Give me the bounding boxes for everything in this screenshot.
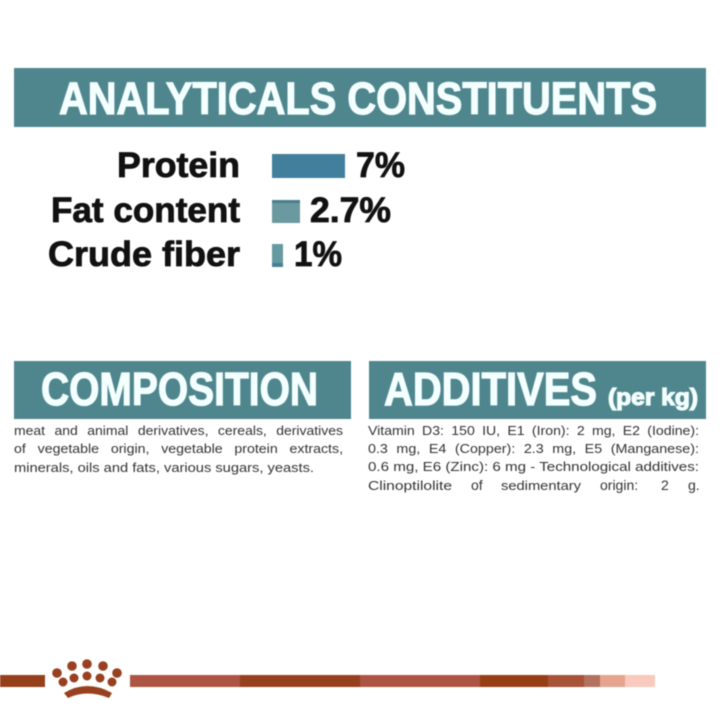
text block: composition: of vegetable origin, vegetable protein extracts, (14, 442, 343, 456)
panel: additives (369, 361, 706, 419)
row: protein: Protein (117, 146, 240, 185)
panel: composition (14, 361, 351, 419)
text block: composition: meat and animal derivatives, cereals, derivatives (14, 424, 343, 438)
text block: additives: Clinoptilolite (368, 479, 452, 493)
bar chart: constituents (48, 146, 405, 274)
text block: composition (14, 424, 343, 475)
row: fat content (51, 191, 391, 230)
row: crude fiber: Crude fiber (48, 235, 240, 274)
text block: additives: of (471, 477, 483, 493)
row: protein: 7% (356, 146, 405, 185)
footer stripe left (0, 675, 45, 687)
text block: additives: sedimentary (501, 479, 582, 493)
heading: composition: COMPOSITION (41, 363, 318, 415)
text block: additives (368, 424, 700, 493)
text block: additives: origin: (600, 477, 638, 493)
heading unit: per kg: (per kg) (608, 384, 698, 410)
row: crude fiber: 1% (294, 235, 342, 274)
text block: additives: Vitamin D3: 150 IU, E1 (Iron): 2 mg, E2 (Iodine): (368, 424, 699, 438)
text block: additives: 0.6 mg, E6 (Zinc): 6 mg - Technological additives: (368, 460, 699, 474)
row: fat content: 2.7% (310, 191, 391, 230)
icon: royal crown (52, 659, 122, 698)
text block: additives: g. (688, 477, 700, 493)
row: protein (117, 146, 405, 185)
text block: composition: minerals, oils and fats, various sugars, yeasts. (14, 461, 314, 475)
text block: additives: 2 (661, 477, 669, 493)
row: fat content: Fat content (51, 191, 240, 230)
heading: additives: ADDITIVES (384, 363, 597, 415)
panel: analyticals constituents header (14, 68, 706, 127)
row: crude fiber (48, 235, 342, 274)
footer gradient stripe (130, 675, 655, 687)
heading: analyticals constituents: ANALYTICALS CONSTITUENTS (59, 73, 657, 124)
text block: additives: 0.3 mg, E4 (Copper): 2.3 mg, E5 (Manganese): (368, 442, 699, 456)
